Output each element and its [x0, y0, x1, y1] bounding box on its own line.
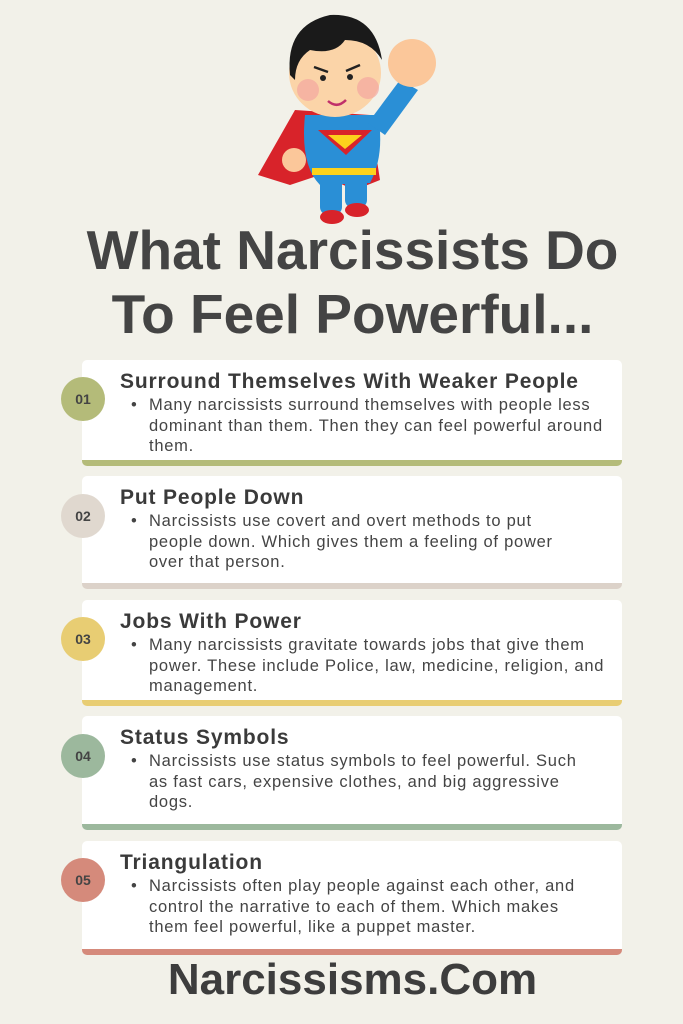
panel: card 3: Many narcissists gravitate towards jobs that give them [149, 636, 585, 654]
panel: card 2: Narcissists use covert and overt methods to put [149, 512, 532, 530]
panel: card 5: Triangulation [120, 851, 263, 874]
panel: card 4: dogs. [149, 793, 193, 811]
panel: card 5 [82, 841, 622, 955]
panel: card 5: Narcissists often play people against each other, and [149, 877, 575, 895]
panel: card 1: Many narcissists surround themselves with people less [149, 396, 590, 414]
badge 02: 02 [75, 508, 91, 524]
panel: card 2 [82, 476, 622, 589]
badge 01: 01 [75, 391, 91, 407]
badge 05: 05 [75, 872, 91, 888]
panel: card 3: management. [149, 677, 258, 695]
panel: card 1: dominant than them. Then they can feel powerful around [149, 416, 603, 434]
badge 05 [61, 858, 105, 902]
badge 04: 04 [75, 748, 91, 764]
panel: card 4: as fast cars, expensive clothes, and big aggressive [149, 772, 560, 790]
panel: card 2: people down. Which gives them a feeling of power [149, 532, 553, 550]
panel: card 4 [82, 716, 622, 830]
panel: card 5: them feel powerful, like a puppet master. [149, 918, 476, 936]
footer: Narcissisms.Com [168, 955, 537, 1004]
title [86, 219, 618, 345]
panel: card 3: Jobs With Power [120, 610, 302, 633]
panel: card 2: Put People Down [120, 486, 304, 509]
badge 02 [61, 494, 105, 538]
icon: superhero [258, 14, 436, 224]
badge 01 [61, 377, 105, 421]
panel: card 5: control the narrative to each of them. Which makes [149, 898, 559, 916]
panel: card 1 [82, 360, 622, 466]
badge 04 [61, 734, 105, 778]
panel: card 1: Surround Themselves With Weaker People [120, 370, 579, 393]
badge 03: 03 [75, 631, 91, 647]
panel: card 1: them. [149, 437, 194, 455]
panel: card 2: over that person. [149, 553, 286, 571]
panel: card 3 [82, 600, 622, 706]
title: To Feel Powerful... [112, 283, 593, 345]
title: What Narcissists Do [87, 219, 618, 281]
panel: card 4: Narcissists use status symbols to feel powerful. Such [149, 752, 577, 770]
panel: card 3: power. These include Police, law, medicine, religion, and [149, 656, 604, 674]
panel: card 4: Status Symbols [120, 726, 289, 749]
badge 03 [61, 617, 105, 661]
